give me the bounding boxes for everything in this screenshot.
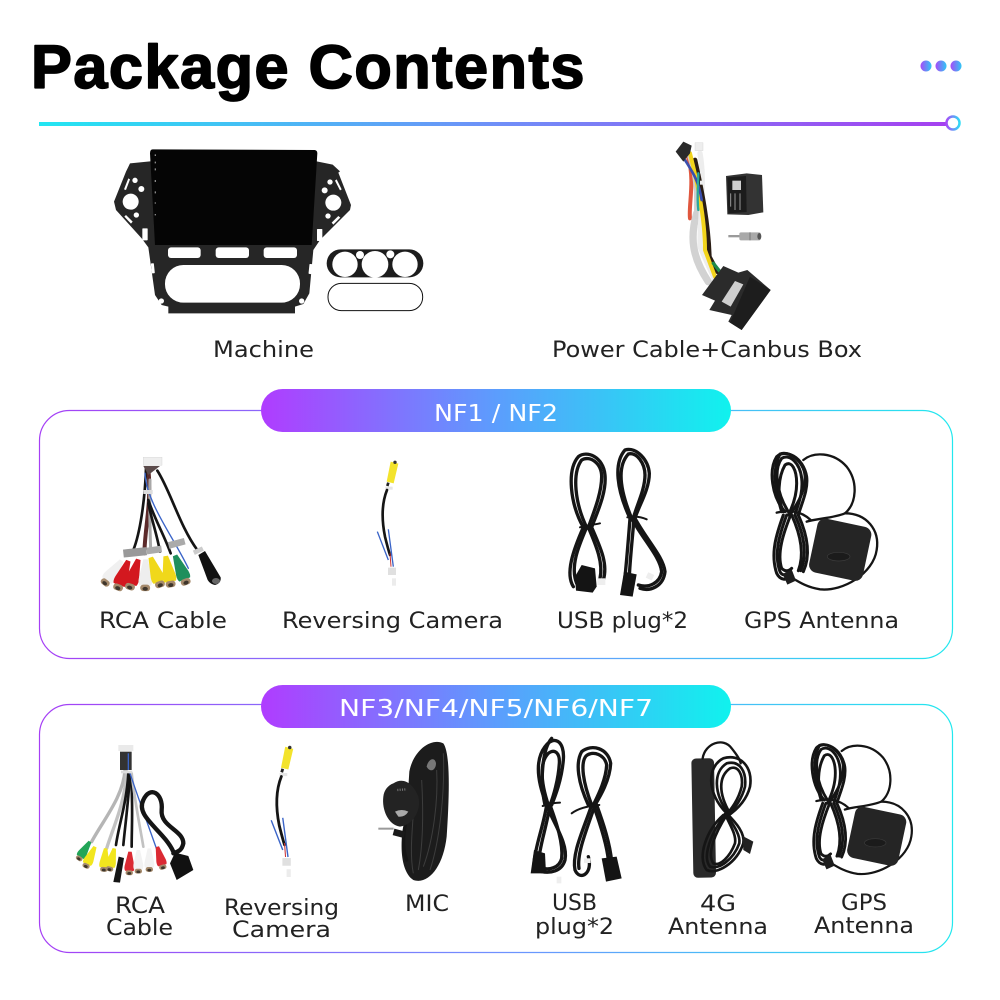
label: Antenna bbox=[668, 915, 768, 940]
label bbox=[814, 891, 914, 939]
item: GPS antenna bbox=[744, 453, 899, 634]
label: 4G bbox=[700, 892, 736, 917]
item: RCA cable bbox=[98, 457, 227, 634]
item: 4G antenna bbox=[668, 742, 768, 940]
header rule with ring end bbox=[39, 116, 960, 130]
GPS antenna image bbox=[812, 745, 912, 874]
label: USB plug*2 bbox=[557, 609, 688, 634]
label: plug*2 bbox=[535, 915, 614, 940]
label bbox=[224, 896, 339, 943]
label: RCA Cable bbox=[99, 609, 227, 634]
panel outline bbox=[40, 704, 952, 952]
machine image bbox=[114, 149, 351, 313]
label: GPS bbox=[841, 891, 887, 916]
panel badge: NF3/NF4/NF5/NF6/NF7 bbox=[339, 696, 653, 722]
item: USB plug x2 bbox=[531, 738, 622, 940]
label bbox=[668, 892, 768, 940]
label: Reversing bbox=[224, 896, 339, 921]
4G antenna image bbox=[691, 742, 753, 878]
label: Power Cable+Canbus Box bbox=[552, 338, 862, 363]
item: RCA cable bbox=[74, 745, 193, 941]
trim pieces bbox=[327, 249, 423, 311]
title: Package Contents bbox=[31, 33, 586, 101]
label: RCA bbox=[115, 894, 165, 919]
label bbox=[535, 891, 614, 940]
USB cables image bbox=[531, 738, 622, 883]
label: USB bbox=[552, 891, 597, 916]
item: machine bbox=[114, 149, 423, 363]
panel: NF3/NF4/NF5/NF6/NF7 bbox=[40, 685, 952, 952]
label bbox=[106, 894, 173, 941]
camera cable image bbox=[377, 461, 398, 586]
label: Camera bbox=[232, 918, 331, 943]
item: reversing camera bbox=[282, 461, 503, 634]
harness image bbox=[676, 142, 771, 330]
label: Cable bbox=[106, 916, 173, 941]
USB cables image bbox=[570, 449, 665, 597]
microphone image bbox=[378, 742, 449, 881]
panel: NF1 / NF2 bbox=[40, 389, 952, 658]
item: USB plug x2 bbox=[557, 449, 688, 634]
RCA cable image bbox=[98, 457, 221, 593]
item: reversing camera bbox=[224, 746, 339, 943]
label: MIC bbox=[405, 892, 449, 917]
camera cable image bbox=[271, 746, 293, 877]
label: Antenna bbox=[814, 914, 914, 939]
label: Machine bbox=[213, 338, 314, 363]
panel badge: NF1 / NF2 bbox=[434, 401, 558, 427]
RCA cable image bbox=[74, 745, 193, 883]
panel badge bbox=[261, 685, 731, 728]
GPS antenna image bbox=[772, 453, 877, 590]
panel outline bbox=[40, 410, 952, 658]
item: GPS antenna bbox=[812, 745, 914, 939]
label: GPS Antenna bbox=[744, 609, 899, 634]
label: Reversing Camera bbox=[282, 609, 503, 634]
panel badge bbox=[261, 389, 731, 432]
decorative dots icon bbox=[920, 60, 962, 72]
item: MIC bbox=[378, 742, 449, 917]
item: power cable and canbus box bbox=[552, 142, 862, 363]
